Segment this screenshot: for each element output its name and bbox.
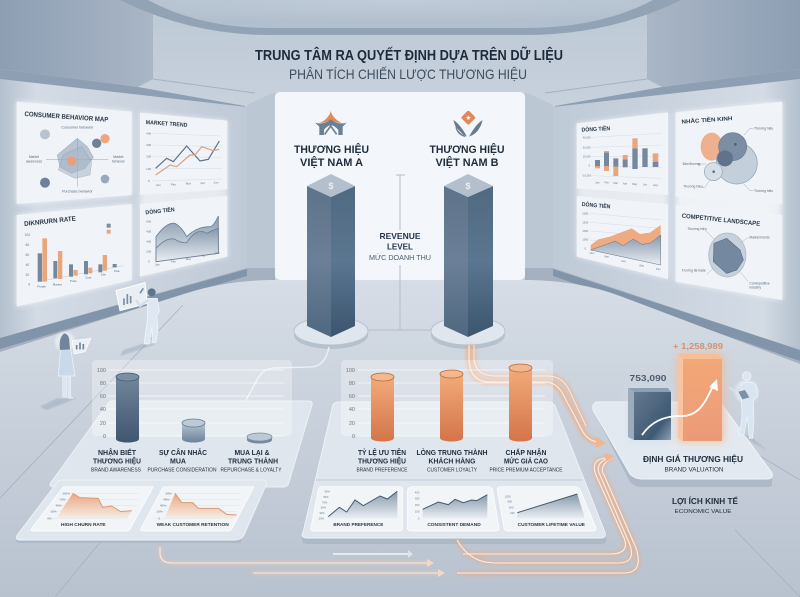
right wall dashboards [577,102,782,300]
panel: cash flow area chart: DÒNG TIỀN [145,205,175,216]
text: economic benefit [672,496,738,515]
mini chart: high churn rate: 40% [56,504,62,508]
mini chart: brand preference: 70% [322,500,328,504]
panel: rate bar chart: 40 [25,263,29,267]
panel: consumer behavior map: awareness [26,159,42,163]
panel: rate bar chart: 20 [25,273,29,277]
label: purchase consideration [148,448,217,474]
panel: venn diagram: Thương hiệu [683,185,703,189]
label: customer loyalty: KHÁCH HÀNG [428,456,476,466]
label: purchase consideration: MUA [170,456,187,466]
panel: cash flow area chart: 0 [148,260,150,264]
panel: rate bar chart: Cost [85,276,92,280]
panel: cash flow area chart [140,196,227,277]
flow: bottom right paths to valuation [457,453,638,573]
mini chart: customer lifetime value: 500 [509,505,514,509]
panel: cash flow bars: Aug [653,183,658,187]
text: economic benefit: LỢI ÍCH KINH TẾ [672,496,738,506]
label: repurchase and loyalty: REPURCHASE & LOYALTY [220,468,282,474]
connector: brand A to funnel [245,347,329,402]
panel: cash flow area chart: Feb [171,260,176,264]
panel: rate bar chart [17,204,132,307]
lower card tray left [16,480,266,543]
label: brand valuation: ĐỊNH GIÁ THƯƠNG HIỆU [643,453,743,464]
panel: competitive landscape: industry [749,286,761,290]
panel: cash flow bars: 30,000 [583,145,591,149]
text: economic benefit: ECONOMIC VALUE [674,509,732,515]
mini chart: high churn rate [31,487,153,531]
panel: cash flow area: 1000 [582,238,589,242]
brand name A: VIỆT NAM A [300,156,363,169]
lower tray left [50,401,312,487]
panel: brand valuation platform [593,341,772,487]
text: value A: 753,090 [630,373,667,383]
brand name B [430,143,505,169]
panel: cash flow area: Sep [639,264,645,268]
brand name A: THƯƠNG HIỆU [294,143,369,156]
flow: orange paths to brand valuation [469,345,606,448]
panel: consumer behavior map: Market [113,155,123,159]
panel: cash flow area chart: 400 [146,230,151,234]
panel: cash flow area chart: Jan [155,262,160,266]
mini chart: consistent demand [407,487,499,531]
panel: market trend: 400 [146,131,151,135]
panel: cash flow bars: Jun [643,182,648,186]
panel: venn diagram: Thương hiệu [754,189,773,193]
mini chart: customer lifetime value: 800 [508,500,513,504]
panel: market trend: Mar [186,182,191,186]
axis: revenue level: REVENUE [380,231,421,241]
panel: competitive landscape: Market trends [749,235,770,239]
panel: market trend: Feb [171,182,176,186]
panel: rate bar chart: 0 [28,282,30,286]
label: price premium acceptance: PRICE PREMIUM ACCEPTANCE [490,468,563,474]
glass chart panel center: 60 [349,394,355,400]
panel: consumer behavior map: Purchase behavior [62,189,93,193]
cylinder: repurchase and loyalty [247,433,272,444]
panel: venn diagram: Thương hiệu [754,127,773,131]
mini chart: customer lifetime value: CUSTOMER LIFETIME VALUE [518,522,585,527]
person: man with display [116,283,159,356]
panel: rate bar chart: Market [53,282,62,286]
glass chart panel left: 60 [100,394,106,400]
panel: cash flow area chart: 600 [146,220,151,224]
panel: cash flow area: Dec [656,267,661,271]
mini chart: high churn rate: 75% [60,497,66,501]
mini chart: consistent demand: CONSISTENT DEMAND [427,522,481,527]
label: price premium acceptance: MỨC GIÁ CAO [504,456,548,466]
panel: cash flow bars: Feb [604,181,609,185]
label: repurchase and loyalty [220,448,282,474]
glass chart panel center: 100 [346,368,355,374]
panel: consumer behavior map: Consumer behavior [61,125,94,129]
mini chart: customer lifetime value [497,487,596,531]
panel: consumer behavior map: Market [29,155,39,159]
mini chart: brand preference: 80% [323,495,329,499]
logo: brand A [315,111,347,135]
panel: consumer behavior map: CONSUMER BEHAVIOR MAP [24,111,109,124]
panel: competitive landscape: Commpetitive [749,281,770,285]
panel: venn diagram: NHẮC TIỀN KINH [681,114,733,126]
panel: rate bar chart: Cha [114,269,120,273]
glass chart panel center: 80 [349,381,355,387]
label: repurchase and loyalty: MUA LẠI & [234,448,270,457]
mini chart: weak customer retention: 40% [160,504,166,508]
label: purchase consideration: SỰ CÂN NHẮC [159,448,208,457]
panel: right funnel [302,360,606,544]
glass chart panel left [92,360,292,440]
glass chart panel center: 20 [349,421,355,427]
label: brand preference: TỶ LỆ ƯU TIÊN [358,448,406,457]
mini chart: weak customer retention: 20% [157,510,163,514]
mini chart: brand preference: 20% [319,516,325,520]
panel: rate bar chart: 60 [25,253,29,257]
mini chart: brand preference: 30% [319,511,325,515]
mini chart: weak customer retention [141,487,254,531]
glass chart panel left: 80 [100,381,106,387]
panel: rate bar chart: DIKNRURN RATE [24,216,77,228]
panel: cash flow area: 0 [585,246,587,250]
panel: rate bar chart: 80 [25,243,29,247]
label: price premium acceptance [490,447,563,474]
glass chart panel left: 100 [97,368,106,374]
logo: brand B [453,110,483,137]
label: customer loyalty [416,448,488,474]
brand name B: VIỆT NAM B [436,156,499,169]
panel: market trend: 300 [146,143,151,147]
panel: market trend: 200 [146,155,151,159]
panel: cash flow bars [577,112,668,195]
panel: cash flow bars: Apr [623,182,627,186]
glass chart panel center [341,360,553,440]
panel: cash flow area: 1500 [582,220,589,224]
panel: rate bar chart: Life [101,272,106,276]
glass chart panel center: 0 [352,434,355,440]
panel: cash flow bars: -10,000 [582,173,592,177]
panel: cash flow bars: 40,000 [583,136,591,140]
mini chart: weak customer retention: 40% [163,497,170,501]
arrow: value growth [642,379,718,435]
lower tray center [302,402,606,544]
label: brand awareness: THƯƠNG HIỆU [93,456,141,466]
axis: revenue level: MỨC DOANH THU [369,253,431,262]
person: analyst with clipboard [729,372,767,450]
subtitle: PHÂN TÍCH CHIẾN LƯỢC THƯƠNG HIỆU [289,66,527,82]
panel: cash flow area: 1000 [582,229,589,233]
mini chart: weak customer retention: 50% [166,491,172,495]
panel: market trend: 0 [148,179,150,183]
panel: venn diagram [676,102,782,204]
panel: cash flow bars: Jan [595,180,600,184]
panel: consumer behavior map: behavior [112,159,126,163]
panel: competitive landscape: COMPETITIVE LANDSCAPE [681,213,760,228]
panel: left funnel [16,360,312,543]
label: repurchase and loyalty: TRUNG THÀNH [228,456,278,466]
flow: bottom left arrows [160,547,445,577]
mini chart: high churn rate: 20% [51,510,57,514]
axis: revenue level [368,175,432,330]
logo: brand B: ★ [466,115,471,121]
mini chart: weak customer retention: 0 [158,516,160,520]
label: customer loyalty: CUSTOMER LOYALTY [427,468,477,474]
mini chart: customer lifetime value: 200 [510,511,515,515]
panel: competitive landscape: Thương hiệu [687,227,707,231]
panel: market trend: Jun [214,180,219,184]
panel: market trend: Apr [200,181,205,185]
panel: competitive landscape: Trương tài trade [682,269,706,273]
mini chart: high churn rate: 0% [47,516,52,520]
label: brand valuation [643,453,743,474]
panel: rate bar chart: 100 [25,233,30,237]
mini chart: brand preference [311,487,403,531]
label: purchase consideration: PURCHASE CONSIDERATION [148,468,217,474]
panel: cash flow bars: DÒNG TIỀN [581,124,610,134]
panel: market trend: 100 [146,167,151,171]
bar: brand B pillar: $ [465,181,471,191]
panel: cash flow area: 2000 [582,212,589,216]
panel: cash flow area chart: 200 [146,250,151,254]
mini chart: customer lifetime value: 1000 [505,494,511,498]
panel: cash flow area chart: Apr [201,254,206,258]
title: TRUNG TÂM RA QUYẾT ĐỊNH DỰA TRÊN DỮ LIỆU [255,46,563,64]
glass chart panel left: 40 [100,407,106,413]
center back panel [275,92,525,280]
brand name B: THƯƠNG HIỆU [430,143,505,156]
mini chart: brand preference: 50% [321,506,327,510]
panel: cash flow area: DÒNG TIỀN [581,200,611,210]
text: value B: + 1,258,989 [673,341,723,351]
left wall dashboards [17,102,227,307]
bar: brand B pillar [431,174,505,349]
label: price premium acceptance: CHẤP NHẬN [506,447,546,457]
panel: cash flow area: Mar [604,254,609,258]
panel: cash flow bars: 15,000 [583,154,591,158]
glass chart panel center: 40 [349,407,355,413]
panel: cash flow bars: 0 [589,164,591,168]
label: brand preference: THƯƠNG HIỆU [358,456,406,466]
label: brand awareness: BRAND AWARENESS [91,468,141,474]
mini chart: consistent demand: 400 [415,490,420,494]
panel: cash flow area chart: Jun [215,250,220,254]
mini chart: consistent demand: 200 [415,503,420,507]
mini chart: high churn rate: 100% [62,491,70,495]
mini chart: high churn rate: HIGH CHURN RATE [61,522,106,527]
cylinder: price premium [509,364,532,442]
bar: orange value cube [678,354,724,442]
brand name A [294,143,369,169]
panel: cash flow bars: May [632,182,638,186]
panel: market trend: Jan [156,183,161,187]
glass chart panel left: 0 [103,434,106,440]
mini chart: brand preference: BRAND PREFERENCE [333,522,383,527]
cylinder: customer loyalty [440,370,463,442]
bar: brand A pillar [294,174,368,349]
mini chart: consistent demand: 300 [415,496,420,500]
person: woman with tablet [40,332,91,410]
axis: revenue level: LEVEL [387,242,413,252]
panel: cash flow area chart: Mar [186,257,191,261]
panel: rate bar chart: Price [70,279,77,283]
label: brand preference: BRAND PREFERENCE [356,468,408,474]
panel: cash flow bars: Mar [613,181,618,185]
panel: market trend [140,113,227,195]
label: brand awareness [91,447,141,474]
panel: cash flow area: Nov [590,251,595,255]
mini chart: consistent demand: 0 [418,516,420,520]
mini chart: weak customer retention: WEAK CUSTOMER RETENTION [157,522,229,527]
label: customer loyalty: LÒNG TRUNG THÀNH [416,448,488,457]
label: brand awareness: NHẬN BIẾT [98,447,136,457]
glass chart panel left: 20 [100,421,106,427]
mini chart: consistent demand: 100 [415,510,420,514]
mini chart: brand preference: 90% [325,490,331,494]
label: brand valuation: BRAND VALUATION [664,468,724,474]
cylinder: brand preference [371,373,394,442]
panel: competitive landscape [676,205,782,300]
cylinder: brand awareness [116,373,139,442]
panel: cash flow area [577,196,668,279]
panel: consumer behavior map [17,102,132,204]
cylinder: purchase consideration [182,419,205,442]
bar: dark value cube [628,388,672,442]
panel: rate bar chart: Purple [37,284,46,288]
bar: brand A pillar: $ [328,181,334,191]
panel: cash flow area chart: 400 [146,240,151,244]
panel: cash flow area: Aug [621,259,626,263]
panel: market trend: MARKET TREND [146,120,188,129]
panel: venn diagram: Bản thương [683,162,701,166]
label: brand preference [356,448,408,474]
